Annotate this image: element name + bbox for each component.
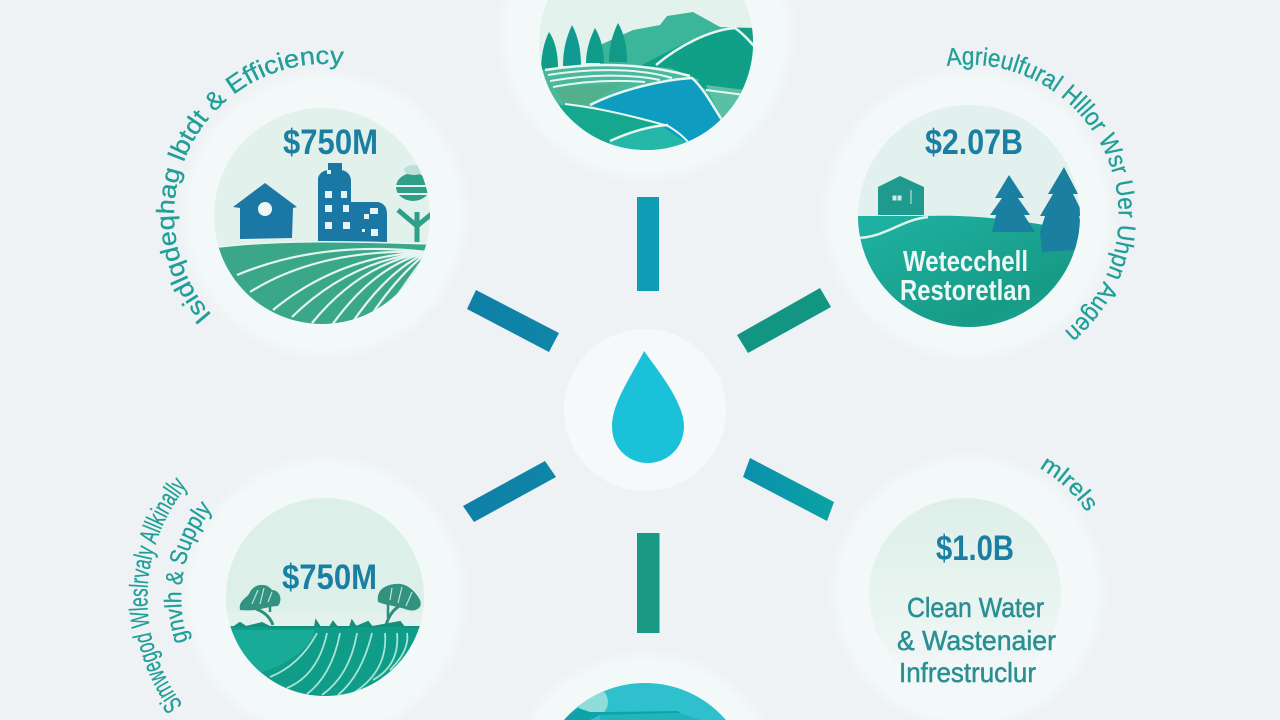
curved heading: micro: mlrels: [1040, 458, 1095, 510]
inner disc: [869, 498, 1061, 690]
icon: building: [878, 176, 924, 215]
icon: tree: [396, 165, 430, 242]
connector bar: top: [637, 197, 659, 291]
panel: lower left node, $750M: [128, 477, 424, 713]
orchard scene illustration: [226, 498, 424, 696]
label: clean water and wastewater: [897, 592, 1056, 688]
value label: $1.0B: [936, 529, 1014, 568]
icon: farmhouse: [233, 183, 297, 239]
central node: water drop: [564, 329, 726, 491]
landscape illustration: [539, 0, 753, 150]
curved heading: agricultural water: Agrieulfural Hlllor Wsr Uer Uhpn Augen: [946, 47, 1136, 340]
label: clean water and wastewater: Clean Water: [907, 592, 1044, 623]
curved heading: inner line: gnvlh & Supply: [164, 500, 212, 643]
value label: $2.07B: [925, 123, 1023, 162]
icon: right tree: [378, 584, 421, 625]
panel: bottom node: [564, 683, 726, 720]
label: clean water and wastewater: Infrestruclur: [899, 657, 1036, 688]
watershed illustration: [855, 102, 1085, 332]
icon: city building: [318, 163, 387, 243]
label: watershed restoration: Wetecchell: [903, 246, 1028, 278]
icon: water drop: [612, 351, 684, 463]
panel: upper left node, $750M: [156, 50, 430, 324]
panel: lower right node, $1.0B: [870, 458, 1095, 688]
icon: left tree: [240, 585, 280, 625]
water scene illustration: [564, 683, 726, 720]
connector bar: lower right: [743, 458, 834, 521]
furrow lines: [270, 633, 407, 695]
label: watershed restoration: [902, 250, 1030, 300]
icon: pine trees: [990, 167, 1084, 252]
panel: top landscape node: [539, 0, 753, 150]
connector bar: upper left: [467, 290, 559, 352]
label: clean water and wastewater: & Wastenaier: [897, 625, 1056, 656]
label: watershed restoration: Restoretlan: [900, 275, 1031, 307]
panel: upper right node, $2.07B: [858, 47, 1136, 340]
value label: $750M: [283, 123, 378, 162]
value label: $750M: [282, 558, 377, 597]
farm scene illustration: [214, 108, 430, 324]
curved heading: outer line: Simwegod Wleslrvaly Allkinally: [128, 477, 188, 713]
connector bar: upper right: [737, 288, 831, 353]
connector bar: lower left: [463, 461, 556, 522]
connector bar: bottom: [637, 533, 660, 633]
curved heading: efficiency: Isidlqdeqhag lbtdt & Efficiency: [156, 50, 344, 324]
furrow lines: [237, 249, 428, 325]
